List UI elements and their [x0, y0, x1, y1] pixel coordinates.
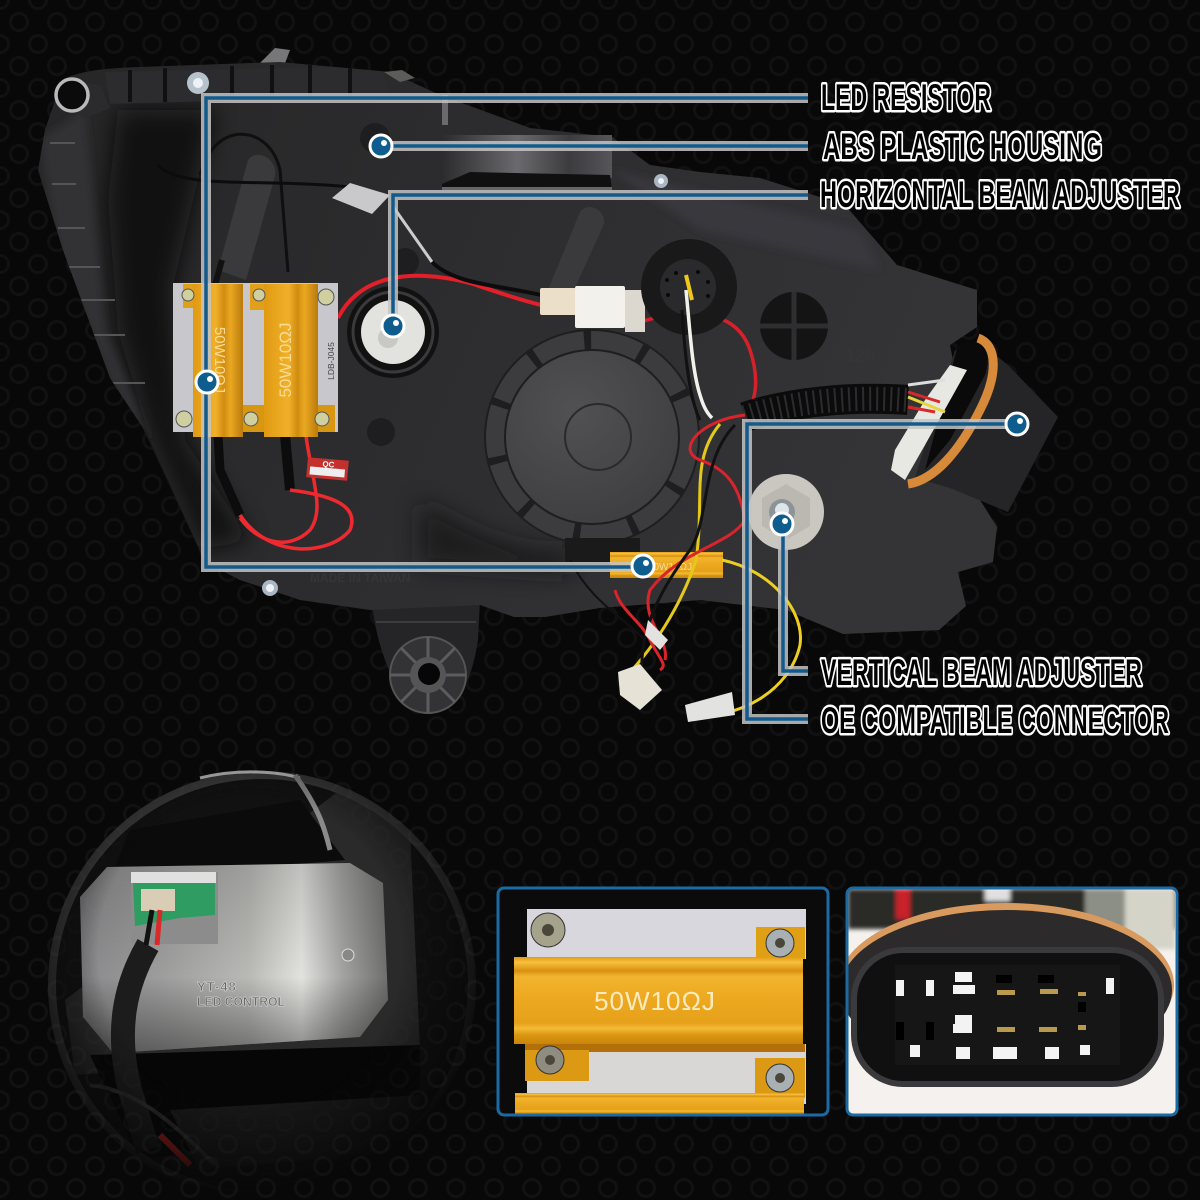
- loose plug and wire tags: [618, 620, 735, 722]
- vertical adjuster nut: [748, 474, 824, 550]
- housing body: [38, 62, 997, 634]
- bottom mounting bracket: [372, 600, 480, 714]
- gold resistor pack on plate: 50W10ΩJ: [276, 322, 295, 398]
- connector body: [915, 345, 1058, 512]
- upper grommet: [641, 239, 737, 335]
- housing shading and moulded recesses: 12V: [845, 346, 877, 366]
- housing shading and moulded recesses: [40, 65, 880, 585]
- gold resistor pack on plate: LDB-J045: [326, 342, 336, 380]
- label tag and QC sticker: QC: [322, 460, 335, 470]
- headlight rear housing photo: [38, 48, 1058, 722]
- housing shading and moulded recesses: MADE IN TAIWAN: [310, 571, 410, 585]
- callout line: horizontal beam adjuster: [382, 195, 808, 337]
- housing screws: [187, 72, 668, 596]
- callout line: LED resistor: [196, 98, 808, 577]
- top fixing tab: [258, 48, 290, 66]
- PCB window: [131, 872, 218, 944]
- label tag and QC sticker: [306, 183, 432, 481]
- black cable: [90, 910, 215, 1165]
- orange seal: [848, 903, 1174, 1006]
- embossed module text: LED CONTROL: [197, 994, 285, 1009]
- callout line: OE compatible connector: [747, 413, 1028, 719]
- labels: [820, 77, 1180, 741]
- inset panel: connector close-up: [838, 888, 1178, 1115]
- callout line: ABS plastic housing: [370, 135, 808, 157]
- harness wires: [570, 275, 800, 716]
- white inline connector: [540, 286, 645, 332]
- label: LED resistor: LED RESISTOR: [821, 77, 991, 118]
- metal module box: [80, 863, 388, 1053]
- blurred wires behind connector: [848, 889, 1178, 949]
- left adjuster circle: [347, 286, 439, 378]
- red and black wire to connector: [338, 262, 756, 412]
- upper gold resistor: [514, 957, 803, 1044]
- top bracket: [384, 70, 612, 190]
- connector pins and slots: [896, 972, 1114, 1059]
- lower gold resistor: [515, 1093, 804, 1115]
- upper right cable gland: [548, 207, 604, 290]
- callout line: vertical beam adjuster: [771, 513, 808, 671]
- resistor plate: [527, 909, 806, 959]
- embossed module text: YT-48: [197, 979, 237, 994]
- resistor value text: 50W10ΩJ: [594, 986, 716, 1016]
- photo: LED control module inside housing: [49, 772, 475, 1198]
- breather tube: [56, 79, 110, 118]
- gold resistor pack on plate: 50W10ΩJ: [211, 327, 228, 393]
- cross vent: [760, 292, 828, 360]
- metal rivet: [342, 949, 354, 961]
- left wires: [158, 134, 352, 549]
- small gold resistor: 50W10ΩJ: [648, 562, 692, 573]
- inset panel: resistor close-up: [498, 888, 828, 1115]
- corrugated wiring loom: [745, 399, 908, 417]
- connector shell: [851, 947, 1164, 1087]
- plate screws: [531, 913, 794, 1092]
- small gold resistor: [610, 552, 723, 578]
- module surround: [108, 790, 313, 867]
- upper left cable gland: [218, 155, 275, 280]
- gold resistor pack on plate: [173, 283, 338, 437]
- white terminal and seal ring: [891, 338, 993, 484]
- large round dust cap: [484, 329, 700, 562]
